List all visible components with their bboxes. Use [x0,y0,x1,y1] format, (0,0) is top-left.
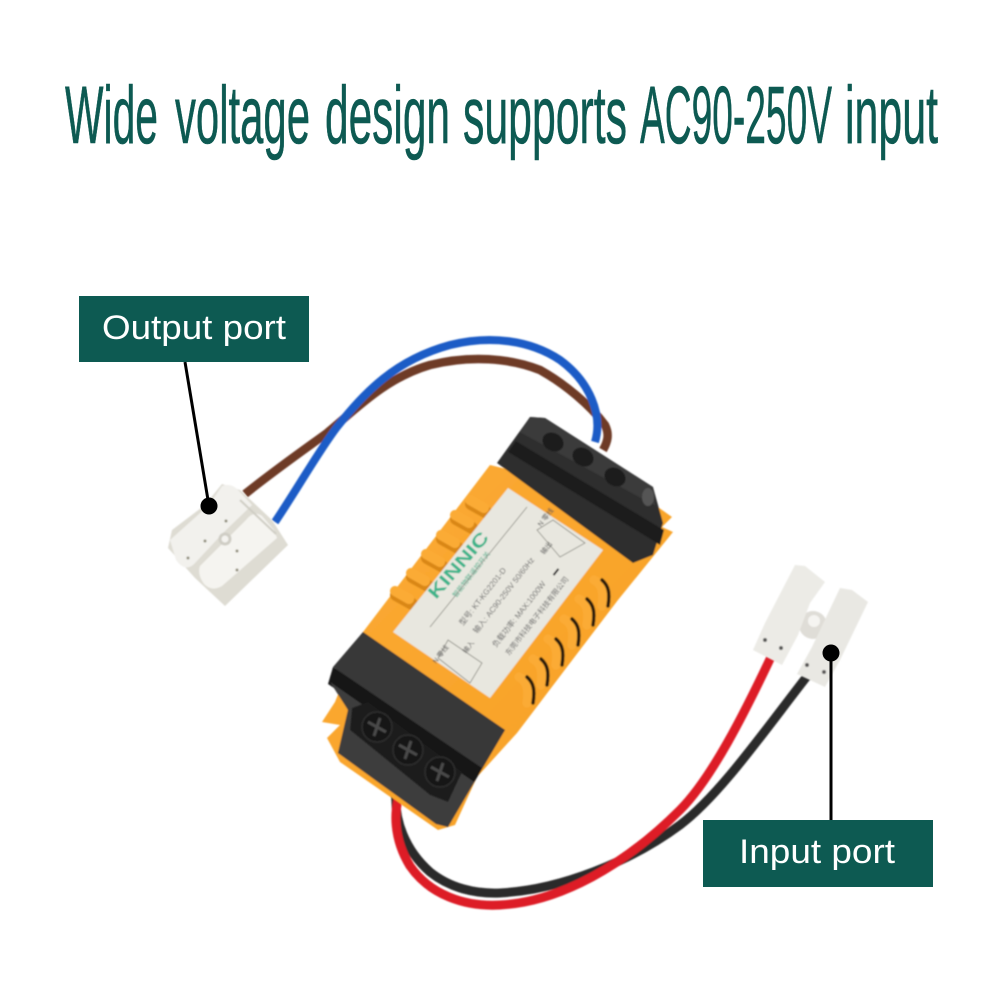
screw heads lower [362,712,455,787]
label line: company: 东莞市科技电子科技有限公司 [503,574,571,657]
label line: model: 型号: KT-KG2201-D [457,566,508,627]
terminal labels: N 零线 [535,506,556,528]
callout: input port [703,820,933,887]
title: supports [463,70,627,161]
screw crosses [368,718,449,781]
upper black block [497,417,664,563]
lower black block [328,632,505,827]
label line: subtitle: 智能物联遥控开关 [450,550,492,599]
divider line and terminal boxes [430,507,585,683]
orange fins left [395,500,487,604]
block top face [333,632,505,768]
load mark [553,568,559,576]
product label [393,488,603,698]
screw recess [350,702,462,802]
leader line: output port [185,362,218,514]
terminal labels [430,506,556,665]
title: Wide [65,70,158,161]
title: voltage [175,70,310,161]
upper block highlight [642,488,654,506]
callout: output port [79,296,309,362]
title: design [325,70,450,161]
label line: input: 输入: AC90-250V 50/60Hz [471,555,536,635]
wires: output brown and blue [245,340,608,522]
orange housing [322,465,673,830]
title [65,70,938,161]
orange slots right [519,580,609,703]
terminal labels: 输出 [538,540,554,556]
output connector [168,484,288,606]
brand logo: KINNIC [424,528,493,603]
block dark band [328,667,482,782]
device [322,417,673,830]
leader line: input port [822,644,840,820]
label line: load: 负载功率: MAX:1000W [490,579,548,649]
input connector [753,565,868,687]
terminal labels: 输入 [460,639,476,655]
block front face [330,682,474,827]
wires: input red and black [396,657,808,905]
callout: output port: Output port [102,309,287,347]
screw heads upper [539,429,629,490]
callout: input port: Input port [739,833,896,871]
terminal labels: N 零线 [430,643,451,665]
